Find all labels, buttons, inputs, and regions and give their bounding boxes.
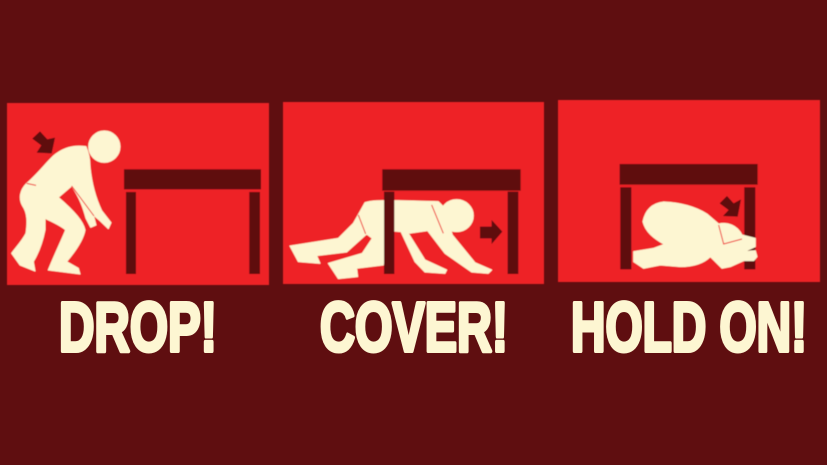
figure: crouching person covering head: [634, 202, 757, 268]
figure: crawling person: [290, 200, 492, 279]
panel: hold on: [558, 100, 820, 282]
heading: drop: DROP!: [59, 288, 217, 366]
illustration: person dropping beside table: [12, 131, 261, 274]
illustration: person holding on under table: [620, 164, 758, 269]
panel: drop: [7, 103, 269, 285]
table: [620, 164, 758, 269]
icon: down-right arrow: [720, 196, 741, 217]
figure: crouching person: [12, 131, 120, 274]
body detail lines: [358, 205, 443, 234]
heading: cover: COVER!: [320, 288, 508, 366]
table: [382, 169, 521, 274]
illustration: person crawling under table: [290, 169, 521, 279]
arm outline: [719, 225, 742, 244]
body detail lines: [27, 183, 94, 216]
panel: cover: [283, 102, 544, 284]
icon: right arrow: [480, 220, 502, 244]
icon: down-right arrow: [32, 131, 55, 153]
table: [124, 169, 261, 274]
